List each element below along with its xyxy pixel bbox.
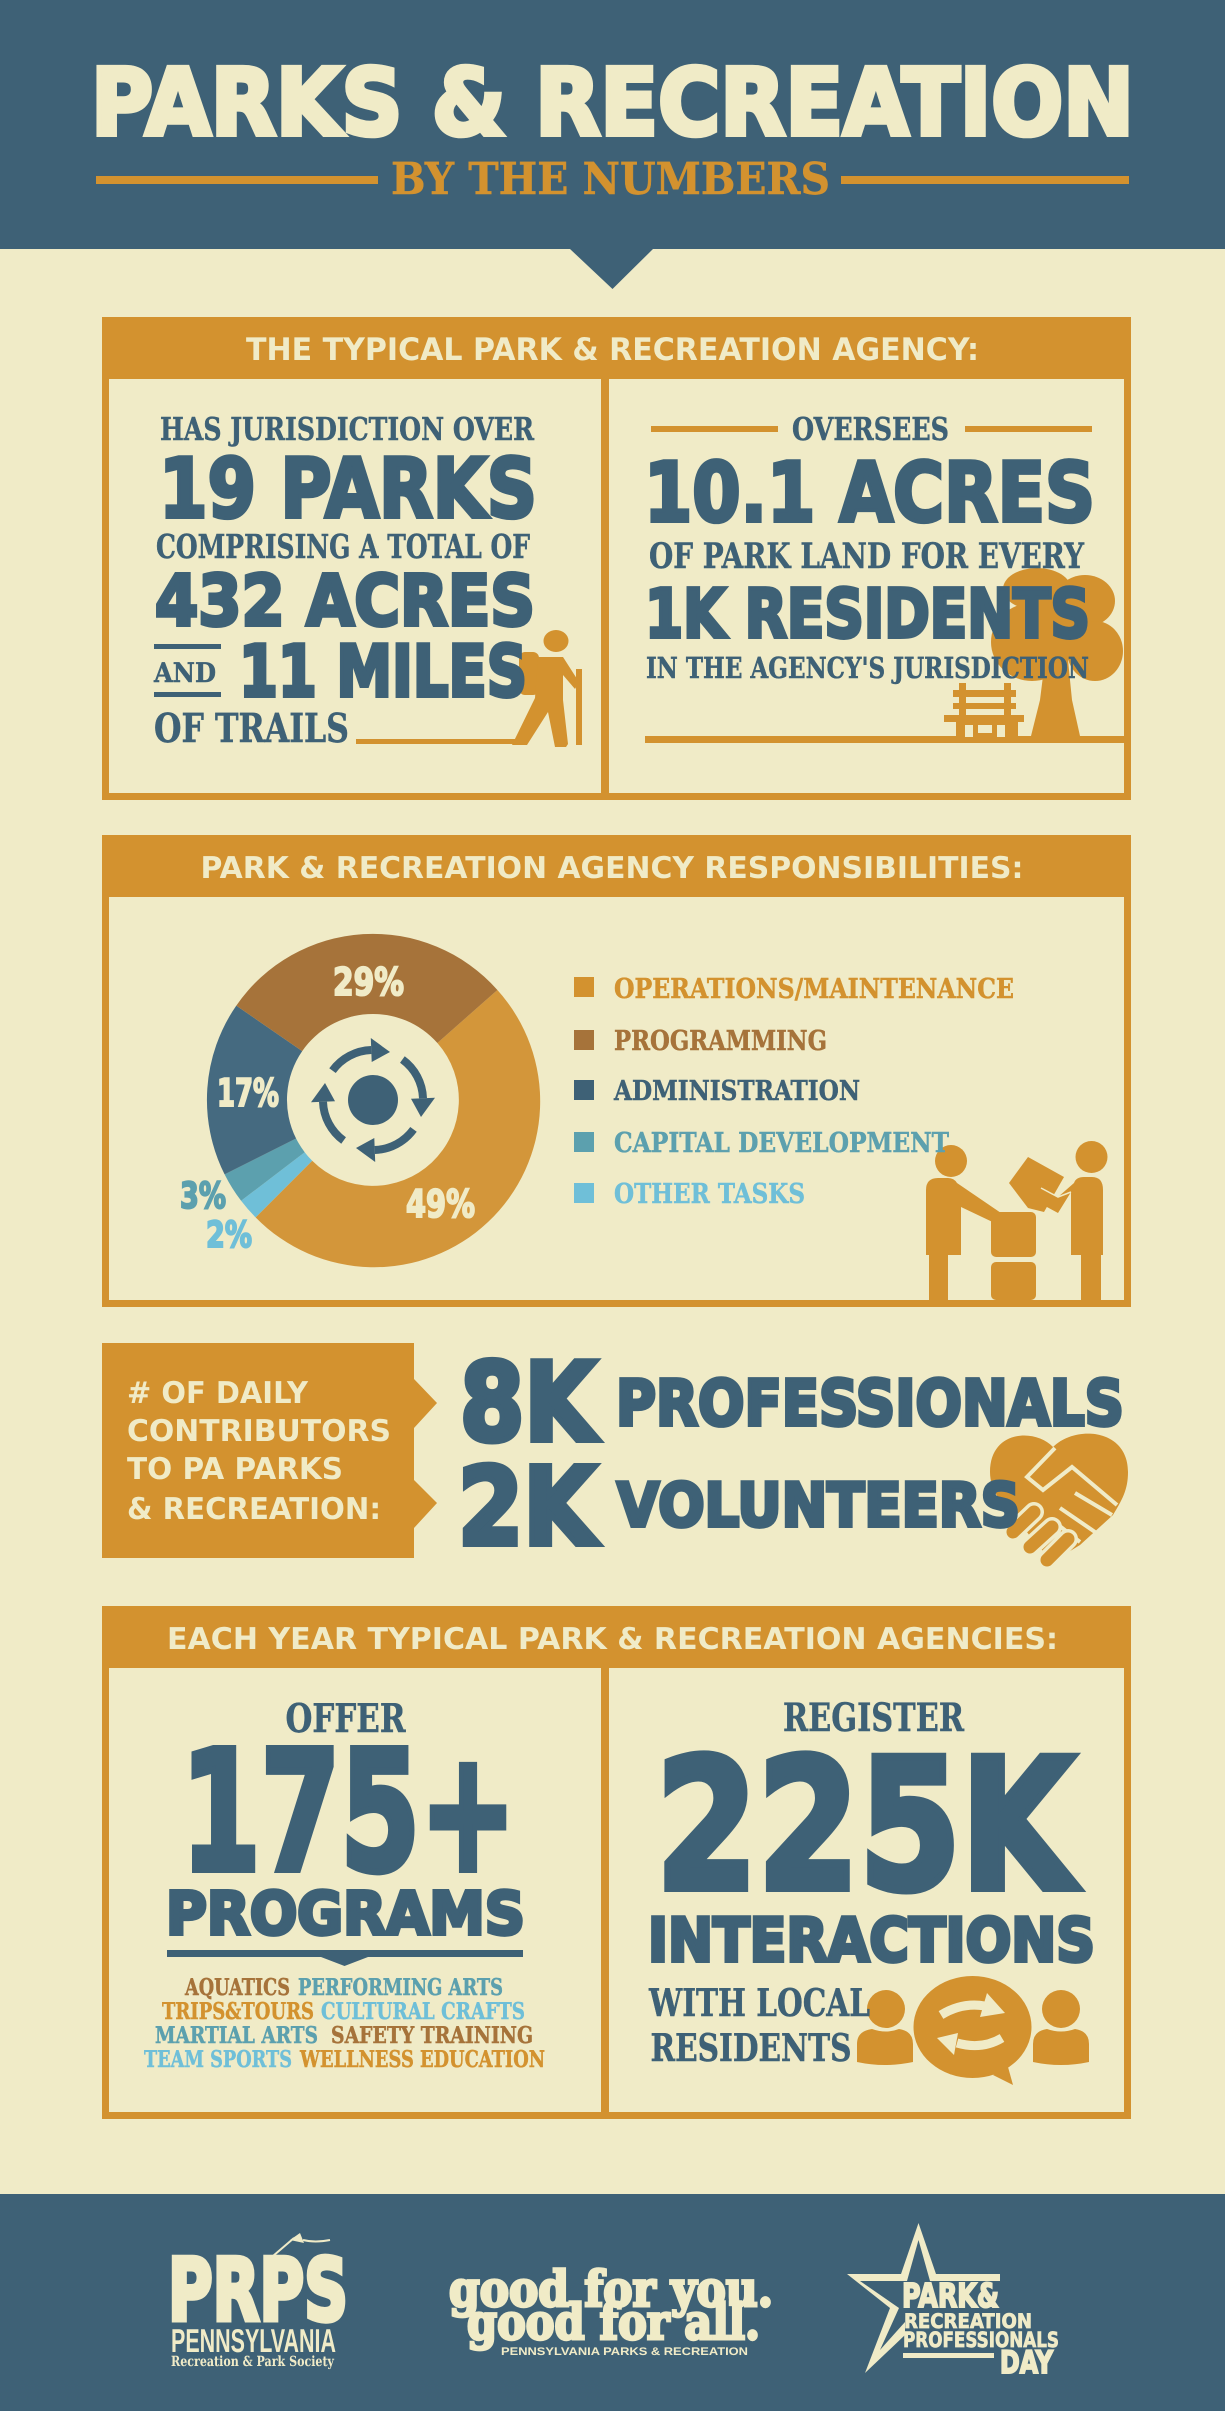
- right column: interactions: RESIDENTS: [650, 2025, 852, 2070]
- panel: typical agency: [102, 317, 1131, 800]
- left column: programs: [144, 1696, 545, 2073]
- program tags: AQUATICS: [184, 1974, 290, 2001]
- percent labels: 17%: [217, 1071, 279, 1115]
- right column: interactions: INTERACTIONS: [648, 1906, 1095, 1976]
- left column text: COMPRISING A TOTAL OF: [156, 527, 530, 566]
- right column text: 1K RESIDENTS: [645, 575, 1090, 653]
- left column text: OF TRAILS: [154, 705, 349, 752]
- stat: professionals: PROFESSIONALS: [616, 1367, 1124, 1440]
- program tags: PERFORMING ARTS: [298, 1974, 503, 2001]
- stat: volunteers: 2K: [458, 1446, 600, 1570]
- logo: good for you, good for all: PENNSYLVANIA PARKS & RECREATION: [501, 2346, 748, 2358]
- icon: hiker: [512, 630, 582, 747]
- program tags: [144, 1974, 545, 2073]
- program tags: SAFETY TRAINING: [331, 2022, 533, 2049]
- right column text: IN THE AGENCY'S JURISDICTION: [646, 651, 1089, 685]
- logo: good for you, good for all: good for you.: [449, 2260, 773, 2318]
- legend: ADMINISTRATION: [613, 1075, 860, 1107]
- right column: interactions: REGISTER: [783, 1695, 964, 1741]
- right column text: OF PARK LAND FOR EVERY: [649, 536, 1085, 577]
- left column text: 11 MILES: [239, 630, 527, 713]
- program tags: TEAM SPORTS: [144, 2046, 292, 2073]
- program tags: MARTIAL ARTS: [155, 2022, 318, 2049]
- logo: PRPS Pennsylvania: [168, 2233, 348, 2370]
- logo: good for you, good for all: good for all.: [467, 2293, 760, 2351]
- left column: programs: PROGRAMS: [166, 1879, 525, 1948]
- panel: each year: [102, 1606, 1131, 2119]
- logo: PRPS Pennsylvania: PENNSYLVANIA: [171, 2322, 336, 2359]
- right column text: 10.1 ACRES: [644, 446, 1095, 541]
- callout: ribbon label: TO PA PARKS: [127, 1452, 343, 1487]
- stat: professionals: 8K: [460, 1341, 599, 1466]
- percent labels: 29%: [333, 960, 404, 1004]
- stat: professionals: [460, 1341, 1124, 1466]
- callout: ribbon label: CONTRIBUTORS: [127, 1414, 391, 1449]
- icon: cycle arrows: [311, 1038, 435, 1162]
- icon: tree and bench: [645, 568, 1127, 743]
- left column text: 19 PARKS: [159, 442, 537, 537]
- program tags: CULTURAL CRAFTS: [321, 1998, 525, 2025]
- stat: volunteers: [458, 1446, 1020, 1570]
- left column text: HAS JURISDICTION OVER: [160, 411, 535, 448]
- right column text: OVERSEES: [792, 411, 949, 448]
- percent labels: [180, 960, 475, 1256]
- percent labels: 2%: [206, 1215, 252, 1256]
- left column text: [153, 411, 537, 752]
- panel heading: EACH YEAR TYPICAL PARK & RECREATION AGENCIES:: [167, 1622, 1058, 1657]
- right column: interactions: WITH LOCAL: [648, 1980, 870, 2025]
- callout: ribbon label: # OF DAILY: [127, 1376, 309, 1411]
- panel heading: PARK & RECREATION AGENCY RESPONSIBILITIES:: [200, 851, 1024, 886]
- right column: interactions: [648, 1695, 1095, 2070]
- footer band: [0, 2194, 1225, 2411]
- header band: [0, 0, 1225, 289]
- logo: Park & Recreation Professionals Day: PROFESSIONALS: [903, 2328, 1059, 2352]
- icon: people stacking blocks: [926, 1141, 1108, 1300]
- legend: [574, 973, 1014, 1210]
- right column: interactions: 225K: [656, 1722, 1078, 1931]
- subtitle: [96, 154, 1129, 205]
- left column text: AND: [153, 658, 216, 689]
- title: PARKS & RECREATION: [91, 50, 1134, 156]
- logo: Park & Recreation Professionals Day: [847, 2223, 1059, 2381]
- percent labels: 49%: [406, 1182, 475, 1226]
- left column: programs: OFFER: [286, 1696, 406, 1742]
- subtitle: BY THE NUMBERS: [391, 154, 830, 205]
- legend: CAPITAL DEVELOPMENT: [614, 1127, 949, 1159]
- legend: OPERATIONS/MAINTENANCE: [614, 973, 1014, 1005]
- legend: PROGRAMMING: [614, 1025, 827, 1057]
- panel: responsibilities: [102, 835, 1131, 1304]
- callout: ribbon label: & RECREATION:: [127, 1492, 381, 1527]
- donut chart: [180, 934, 540, 1267]
- legend: OTHER TASKS: [614, 1178, 805, 1210]
- callout: ribbon label: [102, 1343, 437, 1558]
- panel: daily contributors: [102, 1341, 1128, 1570]
- program tags: TRIPS&TOURS: [162, 1998, 314, 2025]
- icon: handshake heart: [990, 1434, 1128, 1562]
- program tags: WELLNESS EDUCATION: [299, 2046, 545, 2073]
- stat: volunteers: VOLUNTEERS: [617, 1471, 1020, 1541]
- logo: PRPS Pennsylvania: PRPS: [168, 2241, 348, 2341]
- logo: Park & Recreation Professionals Day: RECREATION: [904, 2309, 1032, 2333]
- logo: good for you, good for all: [449, 2260, 773, 2358]
- logo: PRPS Pennsylvania: Recreation & Park Society: [171, 2354, 335, 2370]
- left column: programs: 175+: [181, 1716, 516, 1910]
- icon: people talking: [857, 1976, 1089, 2085]
- percent labels: 3%: [180, 1176, 226, 1217]
- left column text: 432 ACRES: [155, 560, 535, 642]
- right column text: [644, 411, 1095, 685]
- panel heading: THE TYPICAL PARK & RECREATION AGENCY:: [246, 332, 979, 368]
- logo: Park & Recreation Professionals Day: DAY: [1000, 2345, 1053, 2381]
- logo: Park & Recreation Professionals Day: PARK&: [902, 2276, 999, 2315]
